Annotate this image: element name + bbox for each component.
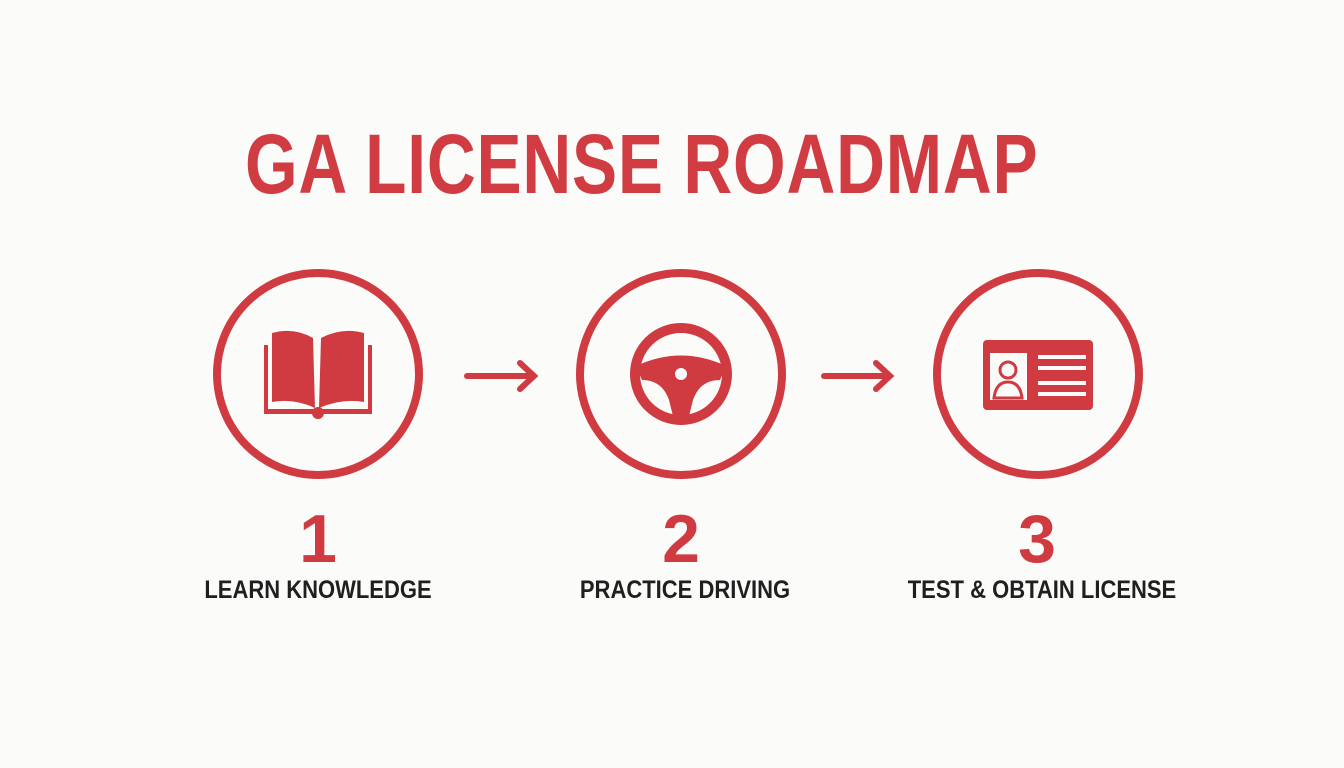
step 1 number: 1 bbox=[299, 501, 337, 577]
step 3 circle with license card icon bbox=[937, 273, 1139, 475]
icon: open book bbox=[264, 331, 372, 419]
arrow 1 bbox=[467, 363, 534, 389]
step 3 label: TEST & OBTAIN LICENSE bbox=[908, 576, 1176, 604]
step 1 label: LEARN KNOWLEDGE bbox=[204, 576, 432, 604]
step 1 circle with book icon bbox=[217, 273, 419, 475]
step 2 label: PRACTICE DRIVING bbox=[580, 576, 790, 604]
step 3 number: 3 bbox=[1018, 501, 1056, 577]
step 2 number: 2 bbox=[662, 501, 700, 577]
icon: steering wheel bbox=[635, 328, 727, 420]
icon: license card bbox=[983, 340, 1093, 410]
arrow 2 bbox=[824, 363, 890, 389]
title: GA LICENSE ROADMAP bbox=[245, 117, 1038, 211]
step 2 circle with steering wheel icon bbox=[580, 273, 782, 475]
